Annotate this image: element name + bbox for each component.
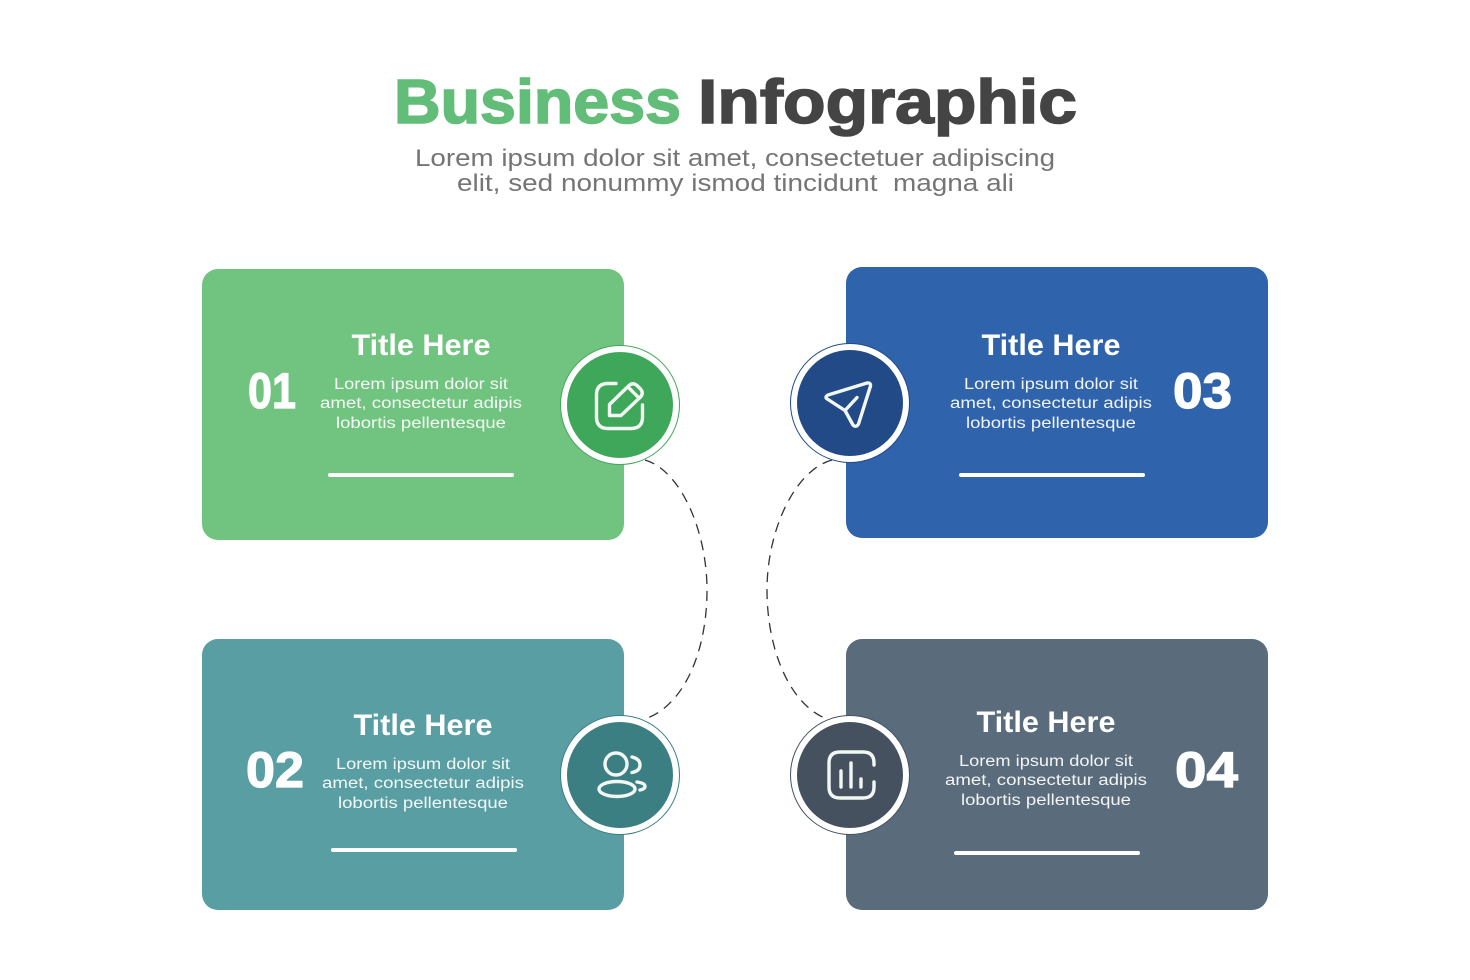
number 04: 04 <box>1175 742 1238 798</box>
text block 02: amet, consectetur adipis <box>322 775 524 792</box>
text block 02: Lorem ipsum dolor sit <box>336 756 511 773</box>
text block 03: lobortis pellentesque <box>966 415 1136 432</box>
text block 03 <box>950 376 1152 432</box>
icon: paper plane badge <box>790 344 910 462</box>
connector: right dashed curve <box>767 460 832 719</box>
text block 04: lobortis pellentesque <box>961 792 1131 809</box>
text block 01: Lorem ipsum dolor sit <box>334 376 509 393</box>
panel: step 02 <box>202 639 624 910</box>
connector: left dashed curve <box>645 460 707 719</box>
text block 04 <box>945 753 1147 809</box>
number 03: 03 <box>1173 363 1232 419</box>
text block 02 <box>322 756 524 812</box>
text block 04: amet, consectetur adipis <box>945 772 1147 789</box>
text block 01: lobortis pellentesque <box>336 415 506 432</box>
heading 03: Title Here <box>982 329 1120 362</box>
text block 04: Lorem ipsum dolor sit <box>959 753 1134 770</box>
text block 02: lobortis pellentesque <box>338 795 508 812</box>
heading 02: Title Here <box>354 709 492 742</box>
title: Infographic <box>698 68 1077 137</box>
title: Business <box>394 68 681 137</box>
panel: step 01 <box>202 269 624 540</box>
icon: users badge <box>560 716 680 834</box>
title <box>394 68 1077 137</box>
number 01: 01 <box>248 363 296 419</box>
icon: bar chart badge <box>790 716 910 834</box>
number 02: 02 <box>246 742 304 798</box>
text block 01: amet, consectetur adipis <box>320 395 522 412</box>
panel: step 03 <box>846 267 1268 538</box>
subtitle: elit, sed nonummy ismod tincidunt magna ali <box>457 170 1014 197</box>
heading 04: Title Here <box>976 706 1116 739</box>
panel: step 04 <box>846 639 1268 910</box>
heading 01: Title Here <box>352 329 490 362</box>
text block 01 <box>320 376 522 432</box>
text block 03: amet, consectetur adipis <box>950 395 1152 412</box>
icon: edit pencil badge <box>560 346 680 464</box>
text block 03: Lorem ipsum dolor sit <box>964 376 1139 393</box>
subtitle <box>415 145 1055 197</box>
subtitle: Lorem ipsum dolor sit amet, consectetuer adipiscing <box>415 145 1055 172</box>
